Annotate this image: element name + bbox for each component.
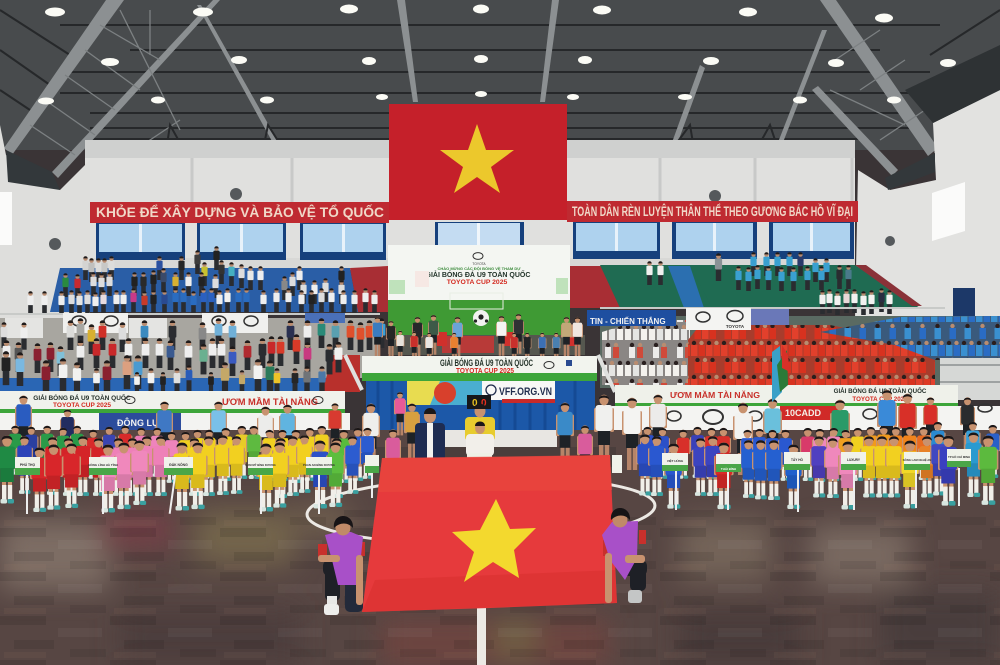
left group players back rows [8,426,375,483]
handheld flag on right [772,345,790,402]
sign: team 5 [303,457,335,514]
center backdrop [388,245,570,336]
left perimeter banners: GIẢI BÓNG ĐÁ U9 TOÀN QUỐC [33,392,131,402]
stands seating [0,265,1000,392]
sign: team 4: NAM MỸ BÌNH DƯƠNG [245,462,276,467]
team banner blue: tin chien thang: TIN - CHIẾN THẮNG [590,316,666,326]
sign: Thai Binh: THÁI BÌNH [721,466,736,471]
door [953,288,975,324]
toyota banner upper right: TOYOTA [726,324,745,329]
sponsor banner [407,381,482,405]
signboards right [612,449,971,512]
window: left wall [0,192,12,245]
icon: flag star [452,499,536,582]
roof truss ends [6,150,935,190]
kneeling child right [602,508,647,603]
sign: team 2 [88,457,118,514]
slogan banner right: TOÀN DÂN RÈN LUYỆN THÂN THỂ THEO GƯƠNG BÁC HỒ VĨ ĐẠI [572,204,853,219]
sign: Luxury [841,452,866,510]
large Vietnamese flag [362,455,617,612]
team banner blue: tin chien thang [587,310,676,326]
right group players front rows [664,435,998,510]
right perimeter banners: ƯƠM MẦM TÀI NĂNG [670,390,760,400]
left group players front rows [0,435,345,512]
scoreboard: 0 [472,398,478,409]
icon: football [473,310,489,326]
wall fans [49,188,895,250]
sign: team 1: PHÚ THỌ [20,462,35,467]
window: right wall [932,182,965,241]
sign: team 4 [245,457,276,514]
left perimeter banners: ĐỘNG LỰC [117,417,166,428]
VFF website banner: VFF.ORG.VN [499,386,552,398]
left side wall [0,125,90,320]
sign: Song Lam Nghe An [903,452,931,508]
ceiling lights [38,4,1000,109]
sign: Tay Ho: TÂY HỒ [791,457,804,462]
sign: near flag [612,455,622,473]
sign: team 5: PHAN AN BÌNH DƯƠNG [303,462,335,467]
man in dark suit [415,408,445,463]
scoreboard: 0 [481,398,487,409]
sign: Luxury: LUXURY [847,458,861,462]
left perimeter banners: ƯƠM MẦM TÀI NĂNG [222,397,318,408]
sign: team 3: ĐẮK NÔNG [169,462,188,467]
sign: team 2: HỒNG LĨNH HÀ TĨNH [88,462,118,467]
sign: TP Ho Chi Minh [947,449,971,506]
slogan banner left [90,202,389,223]
hanging national flag [389,104,567,220]
center tournament banner: GIẢI BÓNG ĐÁ U9 TOÀN QUỐC [440,357,533,368]
steel beams [4,0,938,178]
sign: Thai Binh [716,454,741,510]
crowd: upper left stand [27,246,378,316]
toyota banner upper right [686,308,789,330]
bright stage floor behind flag [443,430,557,447]
slogan banner left: KHỎE ĐỂ XÂY DỰNG VÀ BẢO VỆ TỔ QUỐC [96,205,384,220]
left perimeter banners: TOYOTA CUP 2025 [53,402,111,409]
right group players back rows [640,422,1000,482]
court markings [306,472,656,665]
crowd: upper right blue group [646,252,893,315]
sign: team 3 [164,457,193,514]
sign: team 6 [365,455,379,498]
signboards left [15,455,379,514]
sign: Tay Ho [784,452,810,512]
kneeling child left [318,516,365,615]
left group players middle rows [16,435,361,498]
center backdrop: CHÀO MỪNG CÁC ĐỘI BÓNG VỀ THAM DỰ [437,266,521,271]
crowd: lower right stand [602,316,1000,400]
toyota banner upper left [63,313,268,333]
right perimeter banners: GIẢI BÓNG ĐÁ U9 TOÀN QUỐC [834,387,927,395]
sign: TP Ho Chi Minh: TP HỒ CHÍ MINH [948,454,970,459]
guests behind flag: officials [385,404,593,487]
right group players middle rows [636,432,983,500]
right perimeter banners [612,385,1000,432]
left perimeter banners [0,391,350,433]
banner blue at left stand end [305,313,345,323]
center tournament banner [362,356,597,381]
VFF website banner [482,381,555,403]
sign: Song Lam Nghe An: SÔNG LAM NGHỆ AN [903,457,931,462]
coaches center and back right [394,390,975,475]
official in yellow [465,404,495,441]
center tournament banner: TOYOTA CUP 2025 [456,366,514,375]
center backdrop: GIẢI BÓNG ĐÁ U9 TOÀN QUỐC [426,269,530,279]
officials standing in front of backdrop stand [388,312,570,354]
right perimeter banners: TOYOTA CUP 2025 [852,396,908,403]
slogan banner right [567,201,858,222]
sign: team 1 [15,457,40,514]
center backdrop: TOYOTA [472,262,486,266]
woman in white holding sign [466,422,494,463]
right side wall [855,90,1000,324]
center backdrop: TOYOTA CUP 2025 [447,279,507,286]
sign: Viet Hung [662,453,688,510]
wooden court floor [0,430,1000,665]
crowd: lower left stand [1,318,385,394]
sign: Viet Hung: VIỆT HÙNG [667,458,684,463]
windows [96,222,854,260]
scoreboard [467,395,491,409]
back wall [85,140,855,270]
coaches back left [15,395,380,469]
blue curtain [366,381,595,431]
railing [0,308,945,314]
stair rails [345,355,615,392]
VIP row with officials [372,314,585,363]
right perimeter banners: 10CADD [785,408,822,418]
air conditioners left [5,318,167,338]
ceiling [0,0,1000,178]
roof corner dark right [905,45,1000,123]
